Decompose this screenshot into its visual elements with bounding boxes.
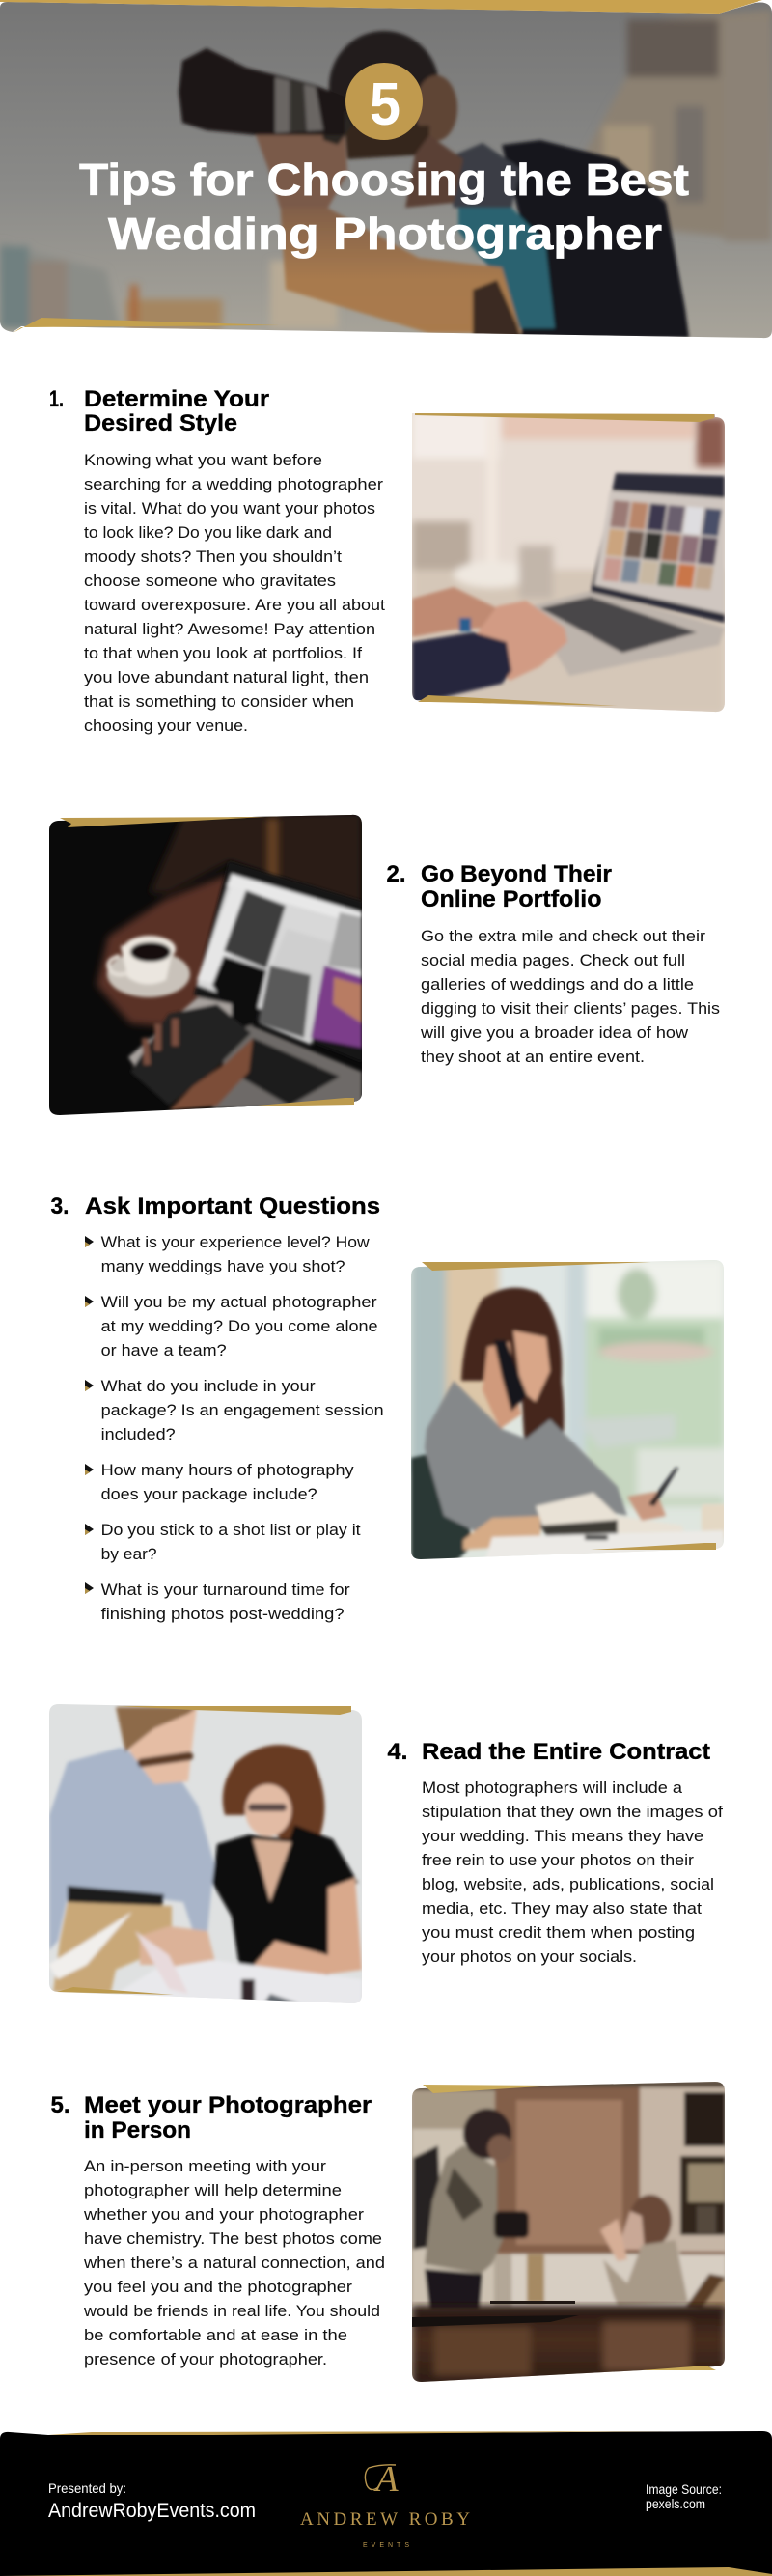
- heading 2: [386, 861, 612, 912]
- gold accent bottom 2: [246, 1098, 354, 1106]
- logo monogram: [365, 2459, 399, 2500]
- woman: [629, 2195, 672, 2247]
- body text 2: [420, 927, 720, 1066]
- body text 1: that is something to consider when: [84, 692, 354, 711]
- body text 2: will give you a broader idea of how: [420, 1023, 689, 1042]
- keyboard: [212, 1025, 362, 1108]
- bullet 2: or have a team?: [101, 1341, 227, 1359]
- gold accent bottom 3: [591, 1543, 716, 1550]
- footer black band: [0, 2431, 772, 2576]
- footer: [0, 2431, 772, 2576]
- heading 3: Ask Important Questions: [85, 1193, 380, 1219]
- heading 2: 2.: [386, 861, 405, 887]
- photo: photographer meeting client at table: [411, 2076, 727, 2388]
- section 3: Ask Important Questions: [50, 1193, 726, 1623]
- arm: [280, 200, 521, 333]
- body text 2: galleries of weddings and do a little: [421, 975, 694, 994]
- title: [79, 154, 689, 259]
- left woman shirt: [49, 1748, 214, 1950]
- body text 5: you feel you and the photographer: [84, 2278, 352, 2296]
- photo: laptop with photo gallery: [412, 410, 726, 714]
- body text 1: to look like? Do you like dark and: [84, 523, 332, 542]
- bullet list: [85, 1233, 384, 1623]
- bullet 5: by ear?: [101, 1545, 157, 1563]
- photo: dark laptop with coffee: [48, 811, 363, 1120]
- heading 1: Determine Your: [84, 386, 269, 412]
- heading 5: 5.: [50, 2092, 69, 2118]
- body text 2: Go the extra mile and check out their: [421, 927, 705, 945]
- presented by: AndrewRobyEvents.com: [48, 2500, 256, 2522]
- section 1: Determine Your Desired Style: [49, 386, 726, 735]
- body text 5: would be friends in real life. You should: [83, 2302, 380, 2320]
- bullet 3: What do you include in your: [101, 1377, 316, 1395]
- paper table: [120, 1958, 361, 2003]
- body text 4: stipulation that they own the images of: [422, 1803, 723, 1821]
- body text 4: blog, website, ads, publications, social: [422, 1875, 714, 1893]
- notebook: [534, 1491, 681, 1532]
- gold accent bottom 1: [418, 695, 618, 706]
- section 4: Read the Entire Contract: [48, 1699, 723, 2013]
- bullet 6: What is your turnaround time for: [101, 1581, 350, 1599]
- image source: Image Source:: [646, 2482, 722, 2497]
- black top: [212, 1825, 358, 1979]
- lower wall: [511, 2254, 726, 2308]
- body text 4: [422, 1778, 723, 1966]
- belt and pants: [68, 1886, 164, 1907]
- body text 1: to that when you look at portfolios. If: [84, 644, 362, 662]
- photo: two women reviewing paper: [48, 1699, 363, 2013]
- gold accent: hero top: [0, 0, 762, 14]
- body text 5: be comfortable and at ease in the: [84, 2326, 347, 2344]
- presented by: [48, 2480, 256, 2522]
- gold accent top 5: [423, 2085, 556, 2093]
- face: [245, 1784, 291, 1836]
- image source: [646, 2482, 722, 2511]
- logo: Andrew Roby Events: ANDREW ROBY: [300, 2509, 470, 2530]
- body text 4: your wedding. This means they have: [422, 1827, 703, 1845]
- title: Wedding Photographer: [108, 209, 662, 259]
- bullet 3: included?: [101, 1425, 176, 1443]
- head: [127, 1710, 198, 1786]
- body text 1: choose someone who gravitates: [84, 572, 336, 590]
- body text 5: An in-person meeting with your: [84, 2157, 326, 2175]
- image source: pexels.com: [646, 2497, 705, 2511]
- laptop base: [529, 591, 725, 676]
- heading 4: Read the Entire Contract: [422, 1739, 710, 1765]
- body text 5: whether you and your photographer: [83, 2205, 364, 2224]
- section 2: Go Beyond Their Online Portfolio: [48, 811, 720, 1120]
- heading 1: 1.: [49, 386, 64, 412]
- hair: [458, 1284, 567, 1441]
- section 5: Meet your Photographer in Person: [50, 2076, 727, 2388]
- writing hand and pen: [627, 1492, 666, 1521]
- body text 1: is vital. What do you want your photos: [84, 499, 375, 518]
- body text 1: searching for a wedding photographer: [84, 475, 383, 493]
- body text 4: your photos on your socials.: [422, 1947, 637, 1966]
- laptop screen: [591, 473, 725, 623]
- photo: woman on phone taking notes: [410, 1255, 726, 1569]
- body text 4: you must credit them when posting: [422, 1923, 695, 1942]
- bullet 3: package? Is an engagement session: [101, 1401, 384, 1419]
- heading 5: [50, 2092, 372, 2143]
- bullet 4: [85, 1461, 354, 1503]
- heading 4: 4.: [388, 1739, 407, 1765]
- arms: [241, 1878, 362, 1979]
- bullet 6: [85, 1581, 350, 1623]
- face and hand: [513, 1330, 550, 1402]
- heading 3: 3.: [50, 1193, 69, 1219]
- title: Tips for Choosing the Best: [79, 154, 689, 205]
- gold accent top 4: [117, 1706, 351, 1715]
- body text 1: toward overexposure. Are you all about: [84, 596, 385, 614]
- body text 4: free rein to use your photos on their: [422, 1851, 694, 1869]
- heading 5: in Person: [84, 2117, 191, 2143]
- body text 1: moody shots? Then you shouldn’t: [84, 547, 342, 566]
- bullet 5: Do you stick to a shot list or play it: [101, 1521, 361, 1539]
- logo: Andrew Roby Events: EVENTS: [363, 2542, 409, 2549]
- body text 5: photographer will help determine: [84, 2181, 342, 2199]
- bullet 4: does your package include?: [101, 1485, 317, 1503]
- body text 2: social media pages. Check out full: [421, 951, 685, 969]
- gold accent footer bottom: [0, 2567, 772, 2576]
- body text 1: [84, 451, 385, 735]
- body text 1: choosing your venue.: [84, 716, 248, 735]
- striped shirt: [425, 1381, 627, 1535]
- hand: [256, 130, 347, 208]
- camera body and lens: [321, 119, 350, 146]
- bullet 3: [85, 1377, 384, 1443]
- heading 1: [49, 386, 269, 436]
- hero photo: photographer with camera: [0, 0, 772, 340]
- cup and table: [701, 1504, 724, 1535]
- paper held: [48, 1912, 132, 1979]
- bullet 1: What is your experience level? How: [101, 1233, 370, 1251]
- man: [413, 2145, 442, 2250]
- number badge: [345, 63, 423, 140]
- heading 2: Go Beyond Their: [421, 861, 612, 887]
- body text 4: media, etc. They may also state that: [422, 1899, 702, 1918]
- gold accent top 2: [60, 817, 265, 827]
- bullet 2: Will you be my actual photographer: [101, 1293, 377, 1311]
- bullet 5: [85, 1521, 361, 1563]
- logo monogram: A: [372, 2459, 399, 2500]
- body text 1: natural light? Awesome! Pay attention: [84, 620, 375, 638]
- chairs: [685, 2274, 725, 2312]
- phone and hand: [128, 997, 232, 1081]
- right woman hair: [223, 1745, 324, 1852]
- backpack: [502, 140, 689, 338]
- body text 5: [83, 2157, 385, 2368]
- gold accent bottom 4: [57, 1987, 174, 1995]
- wall frames: [684, 2092, 726, 2146]
- window blind: [495, 2087, 640, 2254]
- bullet 1: [85, 1233, 370, 1275]
- body text 5: have chemistry. The best photos come: [84, 2229, 382, 2248]
- body text 2: they shoot at an entire event.: [421, 1048, 645, 1066]
- logo: Andrew Roby Events: [300, 2459, 470, 2549]
- hero banner: [0, 0, 772, 340]
- hands and sleeve: [412, 587, 497, 637]
- heading 1: Desired Style: [84, 410, 237, 436]
- body text 5: when there’s a natural connection, and: [83, 2254, 385, 2272]
- bullet 2: at my wedding? Do you come alone: [101, 1317, 378, 1335]
- leg: [463, 1516, 540, 1550]
- gold accent bottom 5: [642, 2366, 716, 2370]
- gold accent top 3: [422, 1262, 651, 1271]
- bullet 1: many weddings have you shot?: [101, 1257, 345, 1275]
- laptop screen: [194, 861, 362, 1062]
- bullet 4: How many hours of photography: [101, 1461, 354, 1479]
- table: [412, 2306, 726, 2388]
- number badge: 5: [370, 71, 400, 138]
- body text 4: Most photographers will include a: [422, 1778, 683, 1797]
- gold accent: hero bottom: [13, 318, 280, 333]
- gold accent top 1: [415, 413, 714, 422]
- body text 2: digging to visit their clients’ pages. This: [421, 999, 720, 1018]
- hair and face: [329, 31, 439, 143]
- heading 2: Online Portfolio: [421, 886, 602, 912]
- bullet 2: [85, 1293, 378, 1359]
- chair: [411, 1448, 473, 1564]
- saucer and cup: [107, 951, 190, 997]
- bullet 6: finishing photos post-wedding?: [101, 1605, 345, 1623]
- gold accent footer top: [48, 2431, 676, 2435]
- presented by: Presented by:: [48, 2480, 126, 2496]
- body text 5: presence of your photographer.: [84, 2350, 327, 2368]
- body text 1: Knowing what you want before: [84, 451, 322, 469]
- heading 5: Meet your Photographer: [84, 2092, 372, 2118]
- body text 1: you love abundant natural light, then: [84, 668, 369, 686]
- shirt: [458, 200, 555, 328]
